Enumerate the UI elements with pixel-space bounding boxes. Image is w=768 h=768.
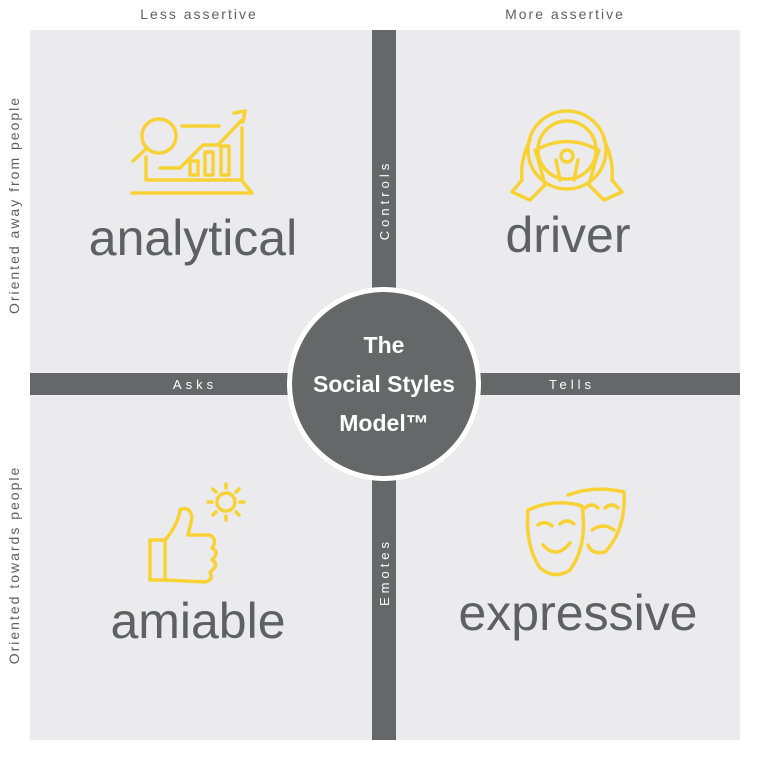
top label: more assertive: More assertive <box>505 6 625 22</box>
center circle: The <box>364 332 404 358</box>
top label: less assertive: Less assertive <box>140 6 258 22</box>
center circle: Social Styles <box>313 371 455 397</box>
side label: away from people: Oriented away from people <box>6 96 22 314</box>
center circle: Model™ <box>339 410 429 436</box>
bar label: tells: Tells <box>549 377 595 392</box>
bar label: asks: Asks <box>173 377 217 392</box>
icon: steering wheel <box>512 111 622 200</box>
center circle <box>287 287 481 481</box>
icon: analytics laptop <box>132 111 252 193</box>
heading: amiable: amiable <box>110 593 286 649</box>
bar label: emotes: Emotes <box>377 538 392 606</box>
panel: analytical quadrant <box>30 30 384 384</box>
horizontal axis bar <box>30 373 740 395</box>
icon: theatre masks <box>528 489 624 575</box>
heading: analytical: analytical <box>89 210 297 266</box>
bar label: controls: Controls <box>377 160 392 240</box>
vertical axis bar <box>372 30 396 740</box>
heading: expressive: expressive <box>458 585 698 641</box>
side label: towards people: Oriented towards people <box>6 466 22 664</box>
panel: expressive quadrant <box>384 384 740 740</box>
icon: thumbs up with sun <box>150 484 244 582</box>
panel: amiable quadrant <box>30 384 384 740</box>
heading: driver: driver <box>505 207 631 263</box>
panel: driver quadrant <box>384 30 740 384</box>
